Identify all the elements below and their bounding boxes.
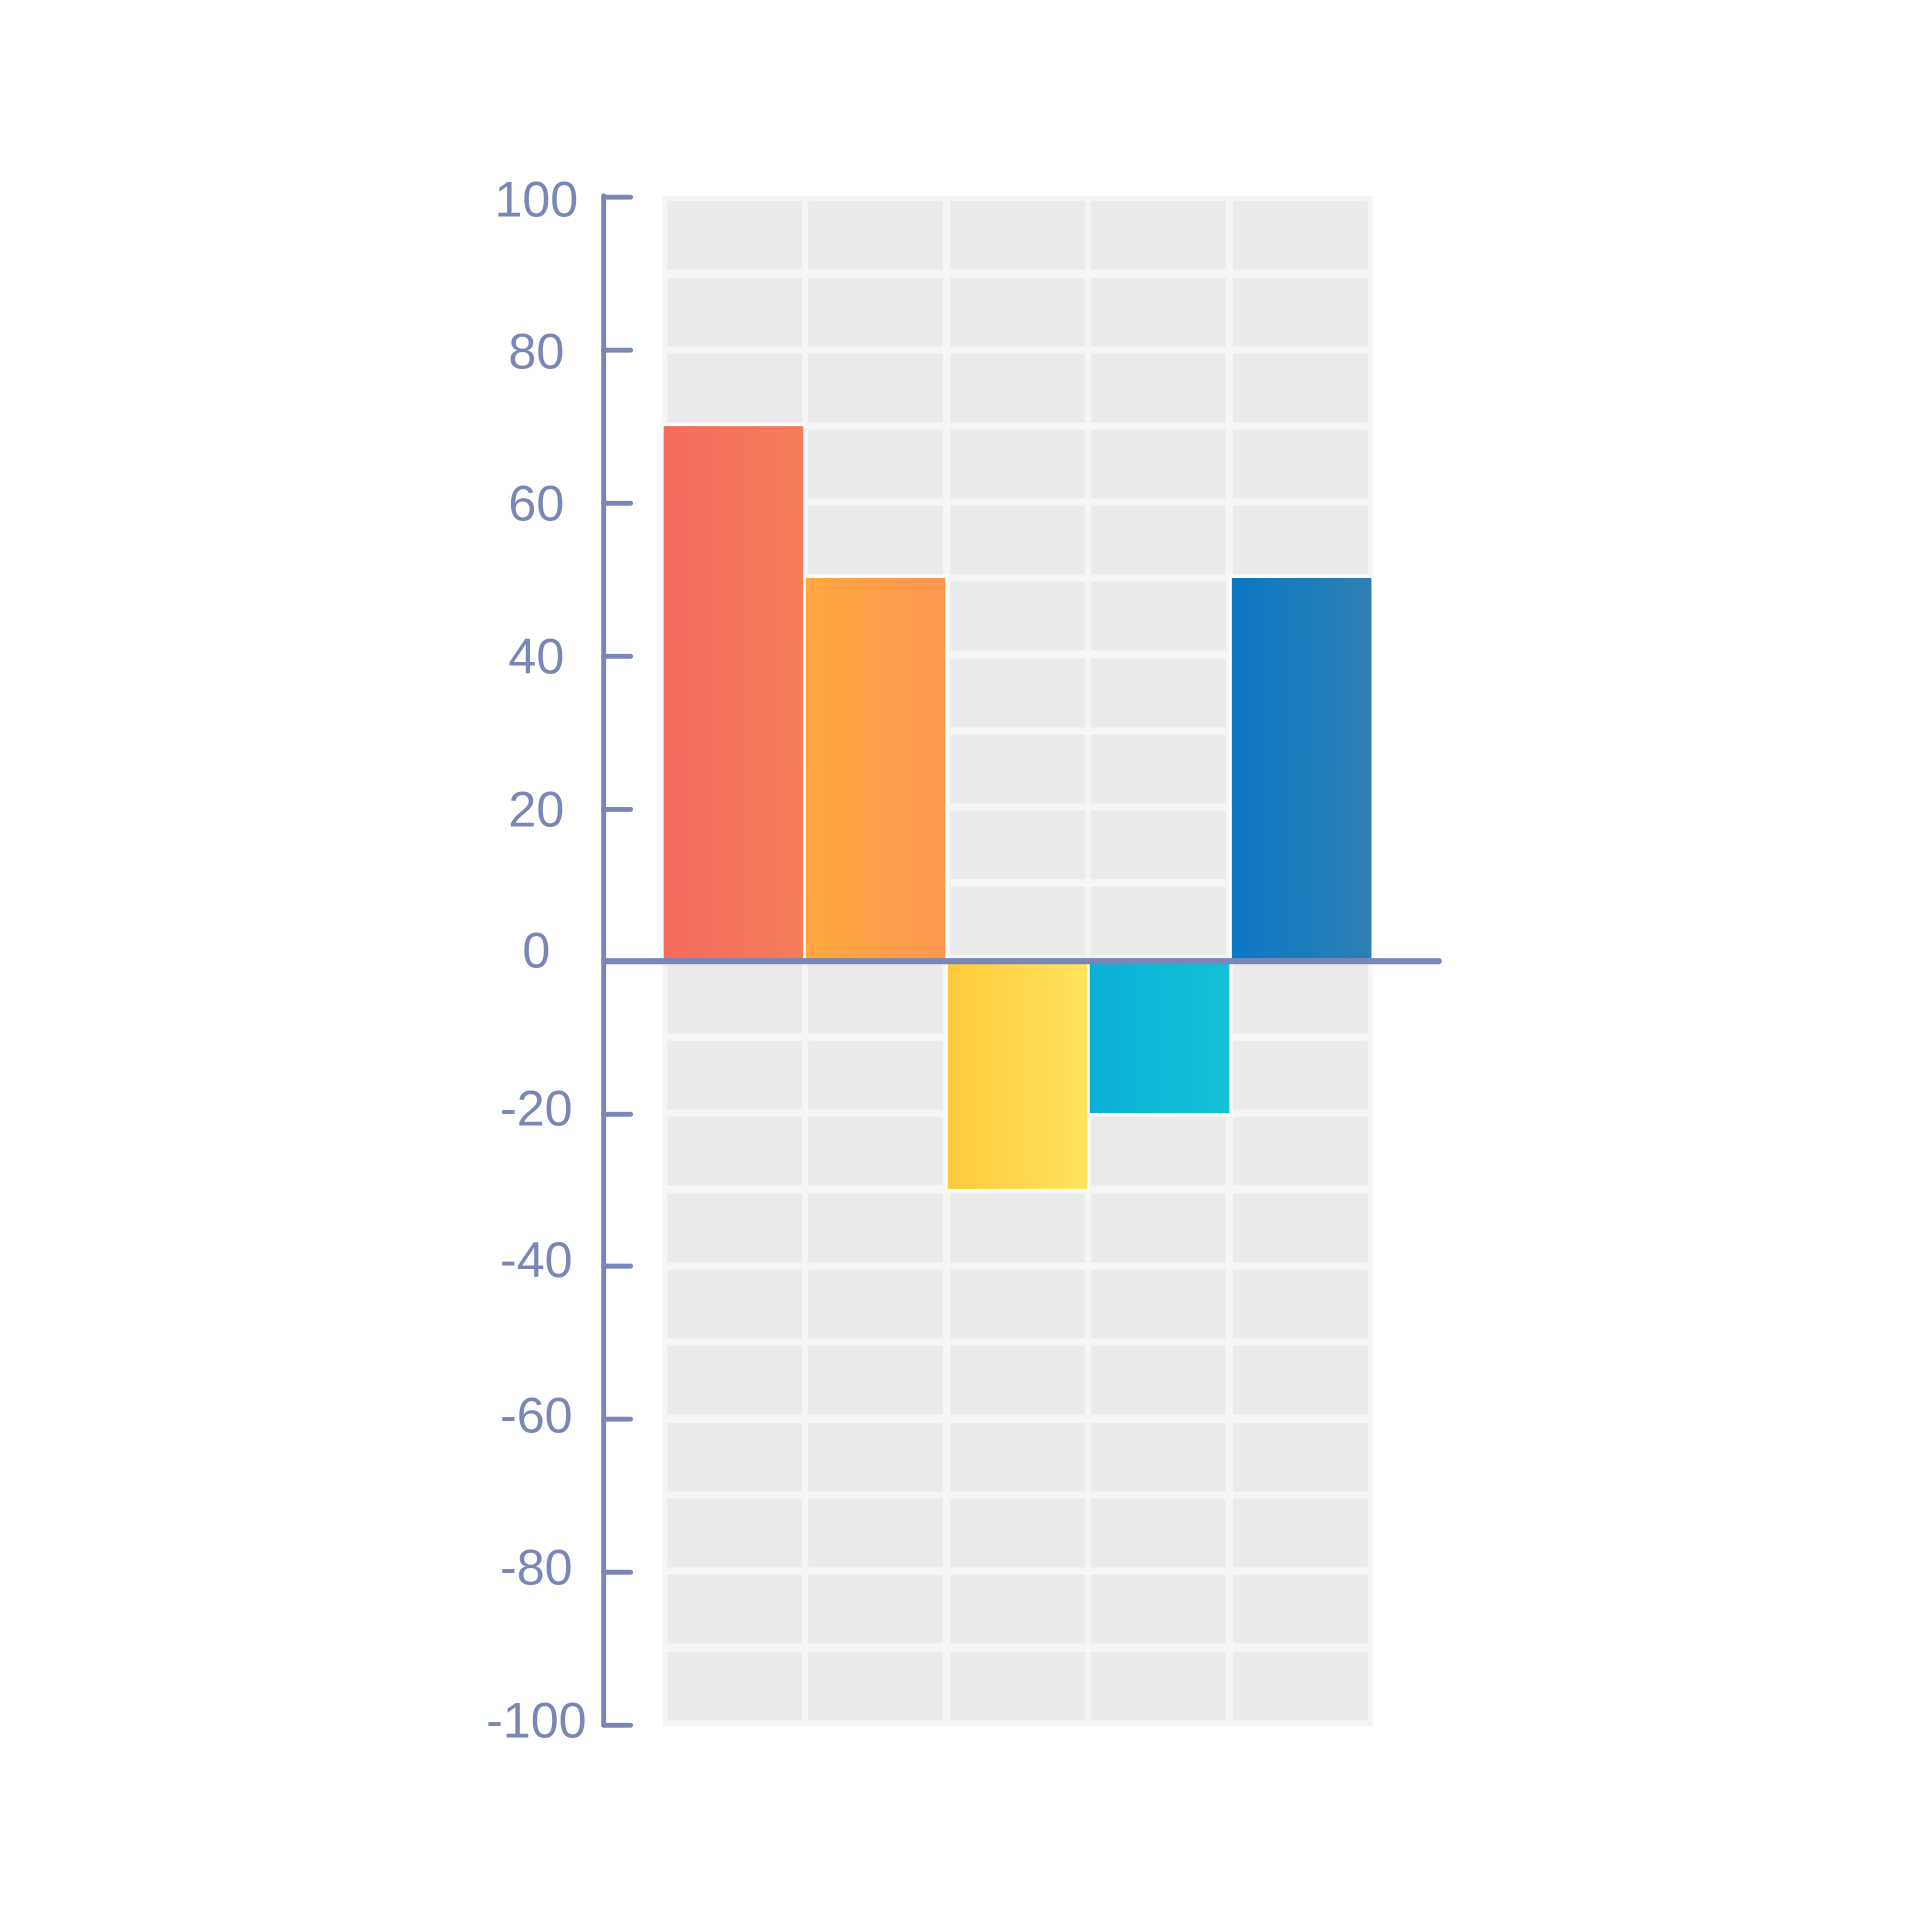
grid background [662,196,1373,1727]
y axis labels: 40 [508,628,564,684]
y axis labels: -20 [500,1080,573,1136]
y axis labels: 60 [508,475,564,531]
bar 1: 70 [662,425,804,961]
y axis labels: -100 [486,1693,587,1749]
y axis labels [486,172,587,1749]
bar 4: -20 [1089,961,1231,1114]
y axis [604,196,631,1725]
bar 3: -30 [947,961,1089,1190]
y axis labels: -60 [500,1388,573,1444]
y axis labels: 0 [522,922,550,978]
x axis zero line [606,959,1439,964]
bar 2: 50 [804,577,947,961]
y axis labels: 20 [508,782,564,838]
y axis labels: 100 [494,172,578,228]
bar chart [662,425,1373,1190]
y axis labels: -80 [500,1539,573,1595]
bar 5: 50 [1231,577,1373,961]
y axis labels: -40 [500,1232,573,1288]
y axis labels: 80 [508,324,564,380]
